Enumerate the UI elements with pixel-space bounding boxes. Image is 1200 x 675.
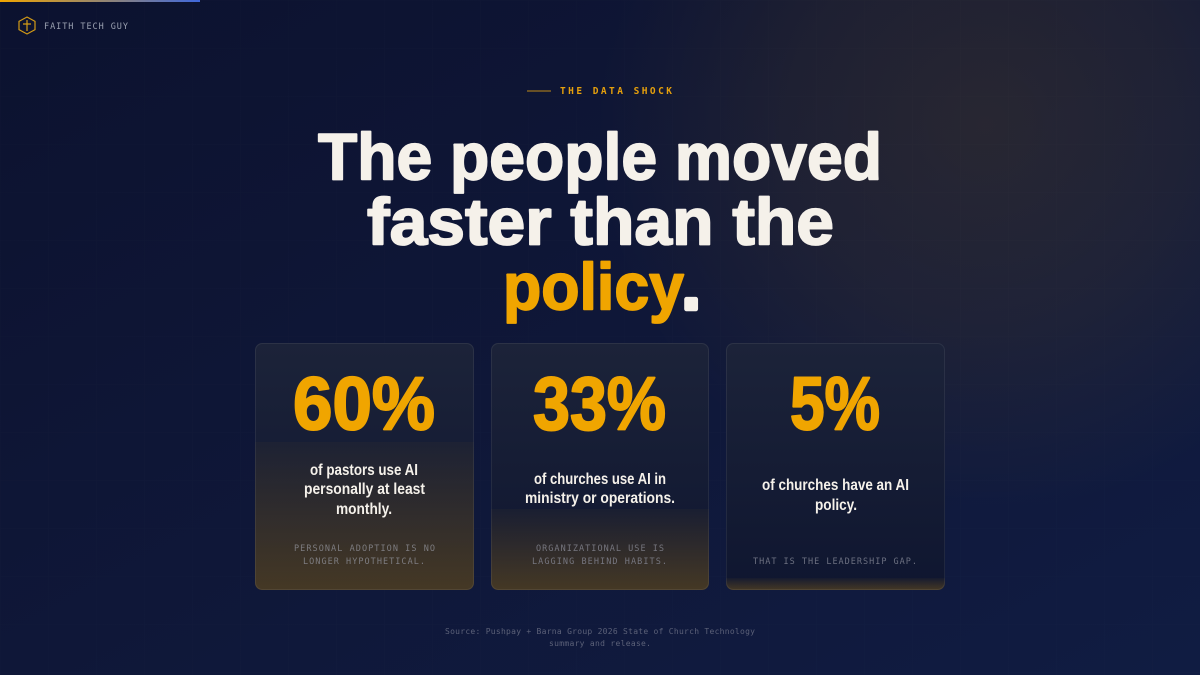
description: monthly. <box>336 501 392 518</box>
icon: hexagon with cross <box>19 17 35 34</box>
description: personally at least <box>304 481 425 498</box>
note: ORGANIZATIONAL USE IS <box>536 544 664 554</box>
description: policy. <box>815 497 857 514</box>
description: of pastors use AI <box>310 462 418 479</box>
source note <box>445 627 755 648</box>
title: policy <box>503 250 684 324</box>
source note: Source: Pushpay + Barna Group 2026 State of Church Technology <box>445 627 755 636</box>
big number: 5% <box>790 362 880 446</box>
title: . <box>682 249 700 323</box>
panel: 33% stat card <box>491 343 709 590</box>
33% fill level <box>491 509 709 590</box>
description <box>304 462 425 518</box>
source note: summary and release. <box>549 639 651 648</box>
note: LONGER HYPOTHETICAL. <box>303 557 425 567</box>
note <box>532 544 667 567</box>
big number: 33% <box>533 362 666 446</box>
description <box>762 477 909 514</box>
title: The people moved <box>318 120 882 194</box>
description: of churches have an AI <box>762 477 909 494</box>
title <box>318 120 882 324</box>
description: of churches use AI in <box>534 471 666 488</box>
note: THAT IS THE LEADERSHIP GAP. <box>753 557 917 567</box>
panel: 5% stat card <box>726 343 945 590</box>
big number: 60% <box>293 362 435 446</box>
note: PERSONAL ADOPTION IS NO <box>294 544 435 554</box>
brand name: FAITH TECH GUY <box>44 22 128 32</box>
note <box>294 544 435 567</box>
description: ministry or operations. <box>525 490 675 507</box>
60% fill level <box>255 442 474 590</box>
eyebrow: THE DATA SHOCK <box>560 86 672 97</box>
top accent bar <box>0 0 200 2</box>
panel: 60% stat card <box>255 343 474 590</box>
description <box>525 471 675 507</box>
title: faster than the <box>367 184 834 258</box>
5% fill level <box>726 578 945 590</box>
note: LAGGING BEHIND HABITS. <box>532 557 667 567</box>
brand logo and name <box>19 17 128 34</box>
